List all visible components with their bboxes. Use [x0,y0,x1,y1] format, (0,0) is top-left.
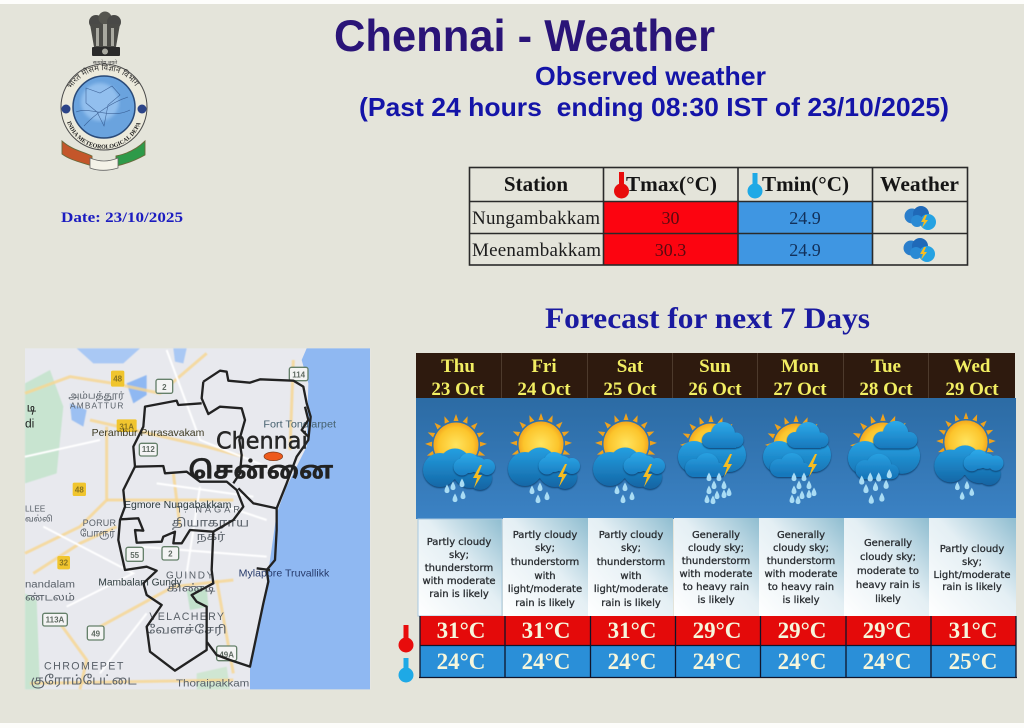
icon: national emblem: सत्यमेव जयते [93,59,117,66]
description: Thu: thunderstorm [425,563,493,574]
header row: 29 Oct [945,379,999,400]
map labels: nandalam [25,579,75,590]
description: Tue: likely [875,594,901,605]
description: Sat: sky; [621,543,641,554]
icon: Fri partly cloudy with thunderstorm [508,413,580,503]
table header [504,172,959,198]
map labels: குரோம்பேட்டை [31,674,137,689]
description: Tue: moderate to [857,566,919,577]
description: Sun [674,518,759,616]
header row: 28 Oct [859,379,913,400]
description: Mon [759,518,844,616]
map labels: Perambur Purasavakam [92,428,204,439]
city label: Chennai: Chennai [216,427,308,455]
map labels: Egmore Nungabakkam [124,500,231,511]
maximum temperature row: 31°C [949,618,997,643]
maximum temperature row: 29°C [863,618,911,643]
map labels: CHROMEPET [44,660,124,672]
forecast panel [398,353,1017,682]
header row: Wed [954,356,991,377]
description: Thu [418,519,502,616]
maximum temperature row: 31°C [522,618,570,643]
table header: Weather [880,172,959,196]
row: Nungambakkam [472,206,936,230]
icon: Wed partly cloudy with rain [934,412,1003,500]
map labels: Fort Tondiarpet [263,419,336,430]
icon: red thermometer [614,172,629,198]
highway shields: 112 [142,445,155,454]
description: Sun: Generally [692,530,740,541]
heading: forecast: Forecast for next 7 Days [545,302,870,335]
description: Sat: light/moderate [594,584,668,595]
map labels [25,367,336,690]
description: Wed [929,518,1016,616]
highway shields: 48 [75,486,84,495]
map labels: Mylapore Truvallikk [239,569,330,580]
map labels: T. NAGAR [177,505,240,515]
icon: Sat partly cloudy with thunderstorm [593,413,665,503]
header row: Sat [617,356,644,377]
description: Tue: Generally [864,538,912,549]
description: Mon: thunderstorm [767,556,835,567]
map labels: வேளச்சேரி [145,623,227,636]
highway shields: 114 [292,370,306,379]
map labels: VELACHERY [149,611,224,623]
description: Sat: with [620,571,642,582]
city label: Chennai: சென்னை [188,457,334,484]
highway shields: 55 [130,551,140,560]
row: Meenambakkam: Meenambakkam [472,240,601,261]
description: Sat: rain is likely [601,598,661,609]
description: Thu: Partly cloudy [427,537,491,548]
description: Fri: light/moderate [508,584,582,595]
icon: red thermometer [398,625,414,652]
minimum temperature row [420,646,1016,677]
table header: Station [504,172,568,196]
map labels: வல்லி [25,514,53,524]
map labels: GUINDY [166,571,214,582]
map labels: di [25,416,34,430]
map labels: கிண்டி [167,583,215,595]
description: Mon: Generally [777,530,825,541]
map labels: நகர் [197,530,226,544]
maximum temperature row: 29°C [693,618,741,643]
highway shields: 49 [91,630,101,639]
logo: India Meteorological Department [60,12,148,171]
header row [416,353,1015,400]
description: Sat: thunderstorm [597,557,665,568]
description: Mon: is likely [782,595,820,606]
description: Thu: with moderate [422,576,496,587]
description: Thu: sky; [449,550,469,561]
description: Wed: sky; [962,557,982,568]
highway shields: 2 [168,550,173,559]
header row: Mon [781,356,819,377]
icon: storm cloud [904,238,935,262]
district boundaries [118,371,311,671]
header row: Fri [531,356,557,377]
description: Sat [588,518,673,616]
icon: seal ring with map globe [60,63,148,150]
subtitle: observed weather: Observed weather [535,61,766,91]
row: Nungambakkam: 24.9 [789,208,821,228]
description: Sat: Partly cloudy [599,530,663,541]
highway shields: 49A [219,650,234,659]
description: Mon: with moderate [764,569,838,580]
highway shields: 48 [113,375,123,384]
description: Mon: to heavy rain [768,582,834,593]
description: Sun: cloudy sky; [688,543,744,554]
description: Fri: rain is likely [515,598,575,609]
icon: ribbons [62,141,145,170]
weather icons band [416,398,1016,519]
header row: Sun [699,356,731,377]
icon: Tue cloudy with rain [848,414,920,504]
description: Thu: rain is likely [429,589,489,600]
description: Wed: Partly cloudy [940,544,1004,555]
minimum temperature row: 24°C [693,649,741,674]
map of Chennai [25,348,370,690]
description: Mon: cloudy sky; [773,543,829,554]
icon: national emblem [89,12,121,66]
icon: seal ring with map globe: भारत मौसम विज्ञान विभाग [68,63,140,87]
map labels: Thoraipakkam [176,679,249,690]
description: Wed: Light/moderate [934,570,1010,581]
highway shields [43,367,308,661]
row: Nungambakkam: Nungambakkam [472,208,600,229]
subtitle: time period: (Past 24 hours ending 08:30 IST of 23/10/2025) [359,92,949,122]
title: Chennai - Weather [334,12,715,61]
header row: 23 Oct [431,379,485,400]
map labels: PORUR [83,518,116,528]
description: Fri: sky; [535,543,555,554]
map labels: போரூர் [80,528,116,540]
description: Fri: Partly cloudy [513,530,577,541]
row: Nungambakkam: 30 [662,208,680,228]
minimum temperature row: 25°C [949,649,997,674]
highway shields: 31A [119,422,134,431]
city label: Chennai [188,427,334,484]
icon: storm cloud [904,206,936,230]
description: Fri [503,518,588,616]
map labels: தியாகராய [172,517,249,531]
highway shields: 2 [162,383,167,392]
location marker [264,452,283,461]
forecast descriptions [418,518,1016,616]
header row: Thu [441,356,475,377]
description: Tue: cloudy sky; [860,552,916,563]
maximum temperature row: 31°C [437,618,485,643]
map labels: அம்பத்தூர் [68,391,125,402]
map labels: ண்டலம் [25,592,75,604]
description: Sun: thunderstorm [682,556,750,567]
icon: Thu partly cloudy with thunderstorm [423,414,495,502]
minimum temperature row: 24°C [608,649,656,674]
description: Tue [844,518,929,616]
description: Wed: rain is likely [942,582,1002,593]
description: Sun: is likely [697,595,735,606]
header row: 27 Oct [773,379,827,400]
map labels: LLEE [25,504,46,514]
highway shields: 32 [59,559,69,568]
row: Meenambakkam: 30.3 [655,240,686,260]
table header: Tmax(°C) [626,172,717,196]
observed weather table [469,167,968,265]
icon: blue thermometer [748,173,762,198]
row: Meenambakkam: 24.9 [789,240,821,260]
maximum temperature row [420,616,1016,646]
map labels: Mambalam Gundy [98,577,182,588]
date: Date: 23/10/2025 [61,210,183,226]
description: Sun: to heavy rain [683,582,749,593]
icon: Sun cloudy with thunderstorm [678,415,746,504]
minimum temperature row: 24°C [522,649,570,674]
header row: Tue [871,356,901,377]
maximum temperature row: 29°C [778,618,826,643]
description: Tue: heavy rain is [856,580,920,591]
maximum temperature row: 31°C [608,618,656,643]
highway shields: 113A [46,616,65,625]
row: Meenambakkam [472,238,935,262]
map labels: AMBATTUR [70,400,123,410]
icon: Mon cloudy with thunderstorm [763,415,831,504]
description: Fri: thunderstorm [511,557,579,568]
minimum temperature row: 24°C [437,649,485,674]
minimum temperature row: 24°C [778,649,826,674]
icon: blue thermometer [398,658,414,682]
header row: 24 Oct [517,379,571,400]
map labels: டி [27,401,37,416]
description: Fri: with [534,571,556,582]
table header: Tmin(°C) [762,172,849,196]
minimum temperature row: 24°C [863,649,911,674]
header row: 26 Oct [688,379,742,400]
description: Sun: with moderate [679,569,753,580]
header row: 25 Oct [603,379,657,400]
